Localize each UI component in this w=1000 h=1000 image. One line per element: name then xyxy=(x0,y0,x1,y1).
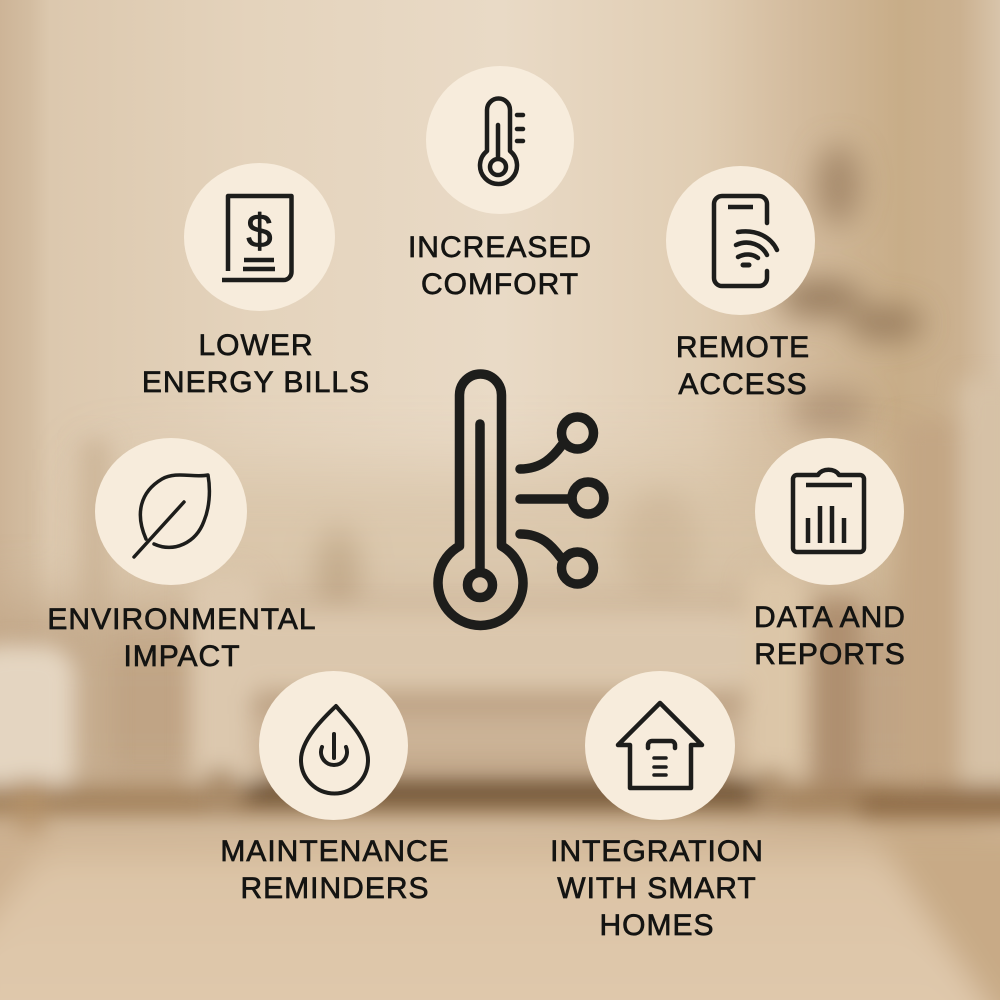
label: data and reports xyxy=(754,601,906,671)
icon: leaf xyxy=(134,475,209,557)
plant shadows xyxy=(816,145,860,225)
circle: environmental impact xyxy=(95,438,247,585)
icon: drop with power xyxy=(301,706,368,794)
label: remote access xyxy=(676,331,810,401)
circle: remote access xyxy=(666,166,815,315)
label: data and reports: DATA AND xyxy=(754,601,906,634)
label: integration with smart homes: INTEGRATION xyxy=(550,835,764,868)
icon: thermometer xyxy=(480,99,523,184)
label: integration with smart homes: WITH SMART xyxy=(557,872,757,905)
label: remote access: ACCESS xyxy=(678,368,808,401)
label: increased comfort xyxy=(408,231,592,301)
label: environmental impact: ENVIRONMENTAL xyxy=(47,603,317,636)
label: maintenance reminders: REMINDERS xyxy=(240,872,430,905)
circle: maintenance reminders xyxy=(259,671,408,820)
label: lower energy bills: LOWER xyxy=(198,329,314,362)
icon: central thermostat xyxy=(438,374,604,625)
icon: phone with wifi xyxy=(714,196,777,286)
label: lower energy bills xyxy=(142,329,370,399)
icon: smart home xyxy=(618,703,702,788)
icon: bill with dollar xyxy=(222,196,292,280)
label: maintenance reminders xyxy=(220,835,450,905)
icon: bill with dollar: $ xyxy=(246,204,273,257)
label: environmental impact: IMPACT xyxy=(123,640,241,673)
circle: increased comfort xyxy=(426,66,574,214)
label: lower energy bills: ENERGY BILLS xyxy=(142,366,370,399)
circle: integration with smart homes xyxy=(585,671,735,820)
label: environmental impact xyxy=(47,603,317,673)
icon: clipboard chart xyxy=(793,470,864,552)
circle: lower energy bills xyxy=(184,163,335,311)
label: increased comfort: INCREASED xyxy=(408,231,592,264)
label: increased comfort: COMFORT xyxy=(421,268,579,301)
label: maintenance reminders: MAINTENANCE xyxy=(220,835,450,868)
label: remote access: REMOTE xyxy=(676,331,810,364)
label: data and reports: REPORTS xyxy=(754,638,906,671)
label: integration with smart homes xyxy=(550,835,764,942)
label: integration with smart homes: HOMES xyxy=(599,909,714,942)
circle: data and reports xyxy=(755,438,904,585)
